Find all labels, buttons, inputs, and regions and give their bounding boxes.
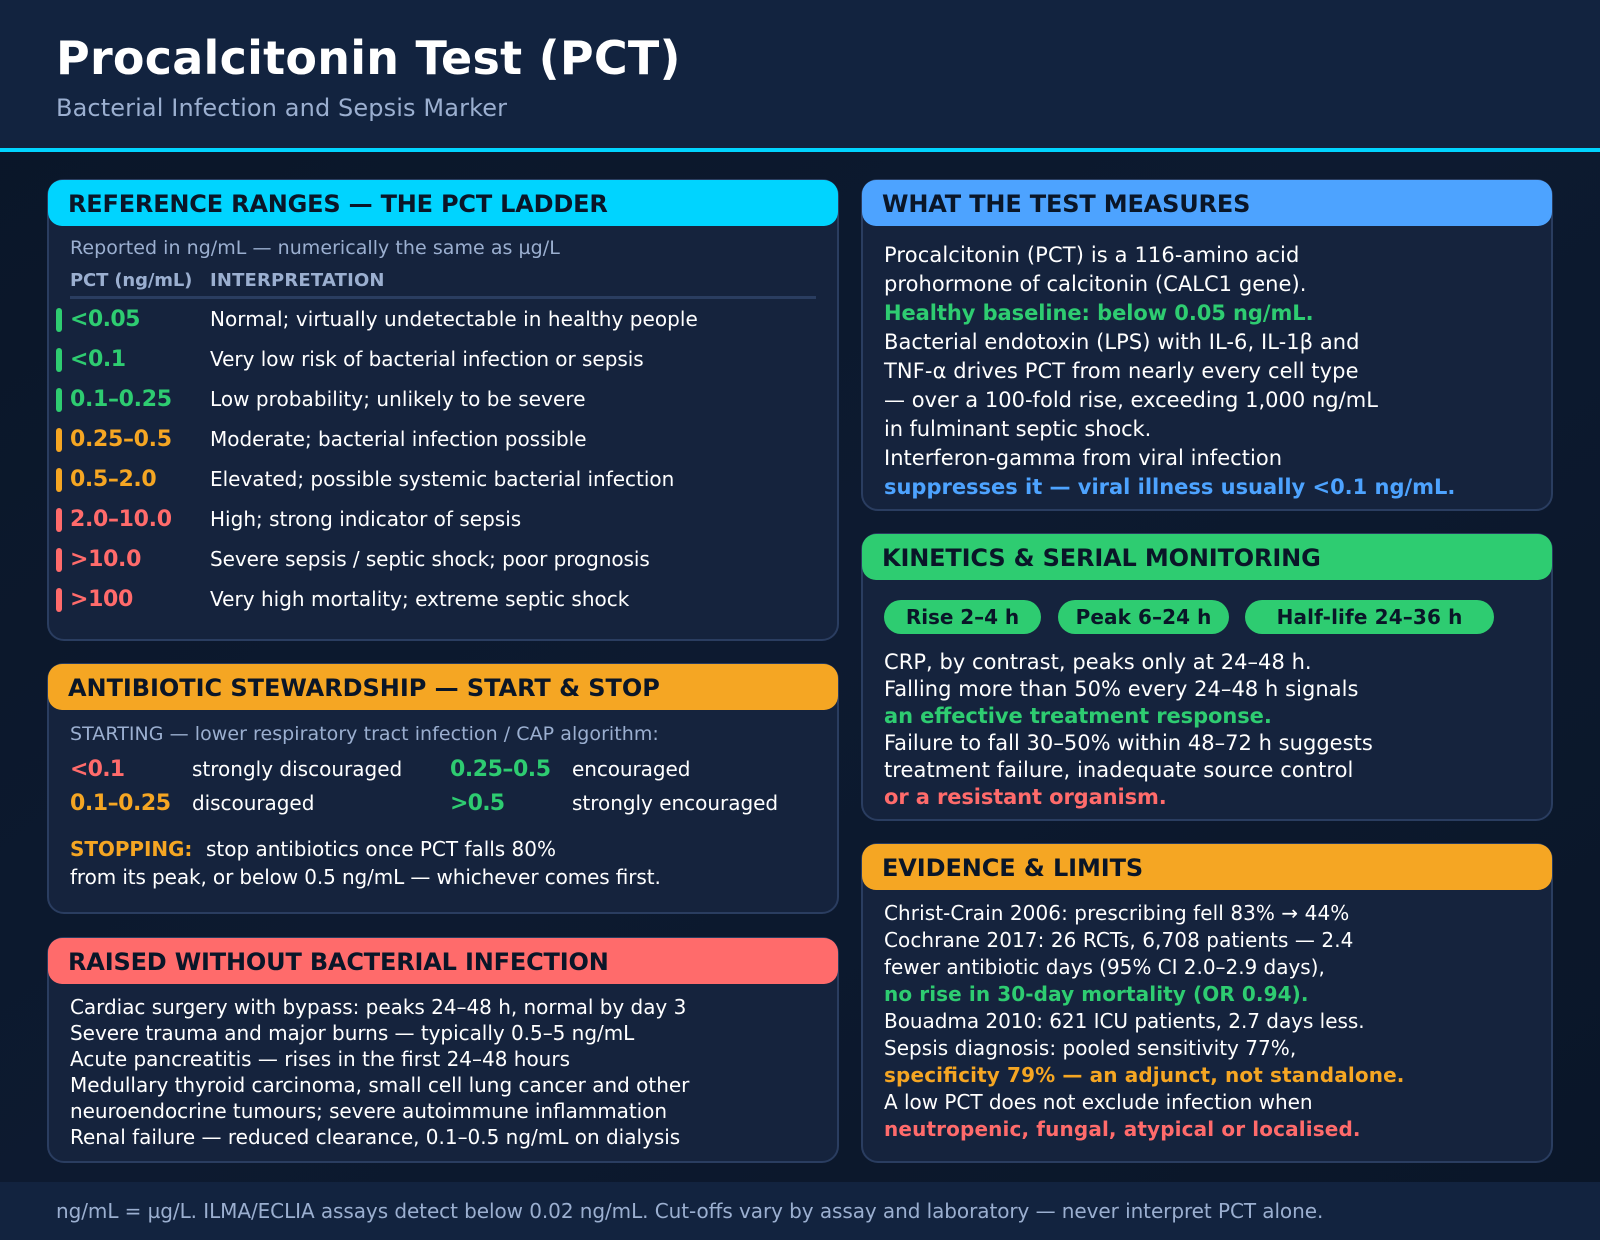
starting thresholds: encouraged — [572, 757, 690, 781]
description: prohormone of calcitonin (CALC1 gene). — [884, 272, 1306, 296]
heading: raised without infection: RAISED WITHOUT BACTERIAL INFECTION — [68, 948, 609, 976]
list of causes: Acute pancreatitis — rises in the first 24–48 hours — [70, 1047, 570, 1071]
row: 0.25–0.5: Moderate; bacterial infection possible — [210, 427, 586, 451]
stopping rule: stop antibiotics once PCT falls 80% — [206, 837, 556, 861]
description: Procalcitonin (PCT) is a 116-amino acid — [884, 243, 1299, 267]
kinetics text: Falling more than 50% every 24–48 h signals — [884, 677, 1358, 701]
list of causes: Renal failure — reduced clearance, 0.1–0.5 ng/mL on dialysis — [70, 1125, 680, 1149]
description: TNF-α drives PCT from nearly every cell type — [883, 359, 1358, 383]
row: >10.0: Severe sepsis / septic shock; poor prognosis — [210, 547, 650, 571]
evidence text: Sepsis diagnosis: pooled sensitivity 77%, — [884, 1036, 1296, 1060]
panel: antibiotic stewardship — [48, 664, 838, 913]
kinetics text: Failure to fall 30–50% within 48–72 h suggests — [884, 731, 1373, 755]
row: 2.0–10.0 — [56, 507, 521, 532]
footer — [0, 1182, 1600, 1240]
title: Procalcitonin Test (PCT) — [56, 31, 680, 85]
evidence text: Christ-Crain 2006: prescribing fell 83% → 44% — [884, 901, 1349, 925]
row: 0.5–2.0: 0.5–2.0 — [70, 467, 157, 492]
list of causes: Severe trauma and major burns — typically 0.5–5 ng/mL — [70, 1021, 635, 1045]
panel: raised without bacterial infection — [48, 938, 838, 1162]
panel: kinetics — [862, 534, 1552, 820]
pill: peak: Peak 6–24 h — [1076, 605, 1211, 629]
row: 0.25–0.5: 0.25–0.5 — [70, 427, 172, 452]
row: <0.05: <0.05 — [70, 307, 140, 332]
evidence text: A low PCT does not exclude infection when — [884, 1090, 1313, 1114]
heading: antibiotic stewardship: ANTIBIOTIC STEWARDSHIP — START & STOP — [68, 674, 660, 702]
evidence text: neutropenic, fungal, atypical or localised. — [884, 1117, 1360, 1141]
evidence text: Cochrane 2017: 26 RCTs, 6,708 patients — 2.4 — [884, 928, 1353, 952]
table header: INTERPRETATION — [210, 270, 384, 291]
heading: raised without infection — [48, 938, 838, 984]
starting thresholds: strongly discouraged — [192, 757, 402, 781]
kinetics text: or a resistant organism. — [884, 785, 1167, 809]
list of causes: neuroendocrine tumours; severe autoimmune inflammation — [70, 1099, 667, 1123]
description: in fulminant septic shock. — [884, 417, 1151, 441]
evidence text — [884, 901, 1404, 1141]
row: >100: Very high mortality; extreme septic shock — [210, 587, 630, 611]
kinetics text: treatment failure, inadequate source control — [884, 758, 1353, 782]
kinetics text — [884, 650, 1373, 809]
pill: rise: Rise 2–4 h — [906, 605, 1019, 629]
list of causes: Cardiac surgery with bypass: peaks 24–48 h, normal by day 3 — [70, 995, 686, 1019]
evidence text: no rise in 30-day mortality (OR 0.94). — [884, 982, 1308, 1006]
row: 0.1–0.25: Low probability; unlikely to be severe — [210, 387, 586, 411]
pill: half-life — [1245, 600, 1494, 634]
heading: antibiotic stewardship — [48, 664, 838, 710]
evidence text: specificity 79% — an adjunct, not standalone. — [884, 1063, 1404, 1087]
starting thresholds: strongly encouraged — [572, 791, 778, 815]
stopping rule: STOPPING: — [70, 837, 192, 861]
description: Healthy baseline: below 0.05 ng/mL. — [884, 301, 1314, 325]
row: >100: >100 — [70, 587, 133, 612]
starting thresholds: 0.25–0.5 — [450, 757, 551, 782]
description: suppresses it — viral illness usually <0.1 ng/mL. — [884, 475, 1455, 499]
row: 2.0–10.0: 2.0–10.0 — [70, 507, 172, 532]
starting thresholds: >0.5 — [450, 791, 505, 816]
pill: peak — [1058, 600, 1229, 634]
row: 0.25–0.5 — [56, 427, 586, 452]
starting thresholds: 0.1–0.25 — [70, 791, 171, 816]
stopping rule — [70, 837, 661, 889]
table header — [70, 270, 816, 299]
subtitle: Bacterial Infection and Sepsis Marker — [56, 94, 507, 122]
table header: PCT (ng/mL) — [70, 270, 192, 291]
row: 0.5–2.0: Elevated; possible systemic bacterial infection — [210, 467, 674, 491]
description: Bacterial endotoxin (LPS) with IL-6, IL-1β and — [884, 330, 1360, 354]
header band — [0, 0, 1600, 152]
heading: reference ranges — [48, 180, 838, 226]
row: >10.0: >10.0 — [70, 547, 141, 572]
kinetics text: CRP, by contrast, peaks only at 24–48 h. — [884, 650, 1312, 674]
starting thresholds: discouraged — [192, 791, 314, 815]
heading: evidence: EVIDENCE & LIMITS — [882, 854, 1143, 882]
panel: evidence and limits — [862, 844, 1552, 1162]
evidence text: fewer antibiotic days (95% CI 2.0–2.9 days), — [884, 955, 1325, 979]
evidence text: Bouadma 2010: 621 ICU patients, 2.7 days less. — [884, 1009, 1365, 1033]
description — [883, 243, 1455, 499]
heading: evidence — [862, 844, 1552, 890]
heading: what the test measures — [862, 180, 1552, 226]
note: starting: STARTING — lower respiratory tract infection / CAP algorithm: — [70, 723, 659, 745]
description: Interferon-gamma from viral infection — [884, 446, 1282, 470]
row: 0.1–0.25 — [56, 387, 586, 412]
heading: reference ranges: REFERENCE RANGES — THE PCT LADDER — [68, 190, 608, 218]
starting thresholds — [70, 757, 778, 816]
pill: half-life: Half-life 24–36 h — [1277, 605, 1462, 629]
heading: what the test measures: WHAT THE TEST MEASURES — [882, 190, 1250, 218]
description: — over a 100-fold rise, exceeding 1,000 ng/mL — [884, 388, 1378, 412]
stopping rule: from its peak, or below 0.5 ng/mL — whichever comes first. — [70, 865, 661, 889]
starting thresholds: <0.1 — [70, 757, 125, 782]
row: 2.0–10.0: High; strong indicator of sepsis — [210, 507, 521, 531]
row: <0.1: <0.1 — [70, 347, 126, 372]
row: <0.05: Normal; virtually undetectable in healthy people — [210, 307, 698, 331]
panel: reference ranges — [48, 180, 838, 640]
footer: ng/mL = µg/L. ILMA/ECLIA assays detect below 0.02 ng/mL. Cut-offs vary by assay and laboratory — never interpret PCT alone. — [56, 1199, 1323, 1223]
note: units: Reported in ng/mL — numerically the same as µg/L — [70, 237, 560, 259]
list of causes: Medullary thyroid carcinoma, small cell lung cancer and other — [70, 1073, 690, 1097]
heading: kinetics: KINETICS & SERIAL MONITORING — [882, 544, 1321, 572]
panel: what the test measures — [862, 180, 1552, 510]
kinetics text: an effective treatment response. — [884, 704, 1272, 728]
row: <0.1: Very low risk of bacterial infection or sepsis — [210, 347, 644, 371]
pill: rise — [884, 600, 1041, 634]
list of causes — [70, 995, 690, 1149]
heading: kinetics — [862, 534, 1552, 580]
row: 0.1–0.25: 0.1–0.25 — [70, 387, 172, 412]
